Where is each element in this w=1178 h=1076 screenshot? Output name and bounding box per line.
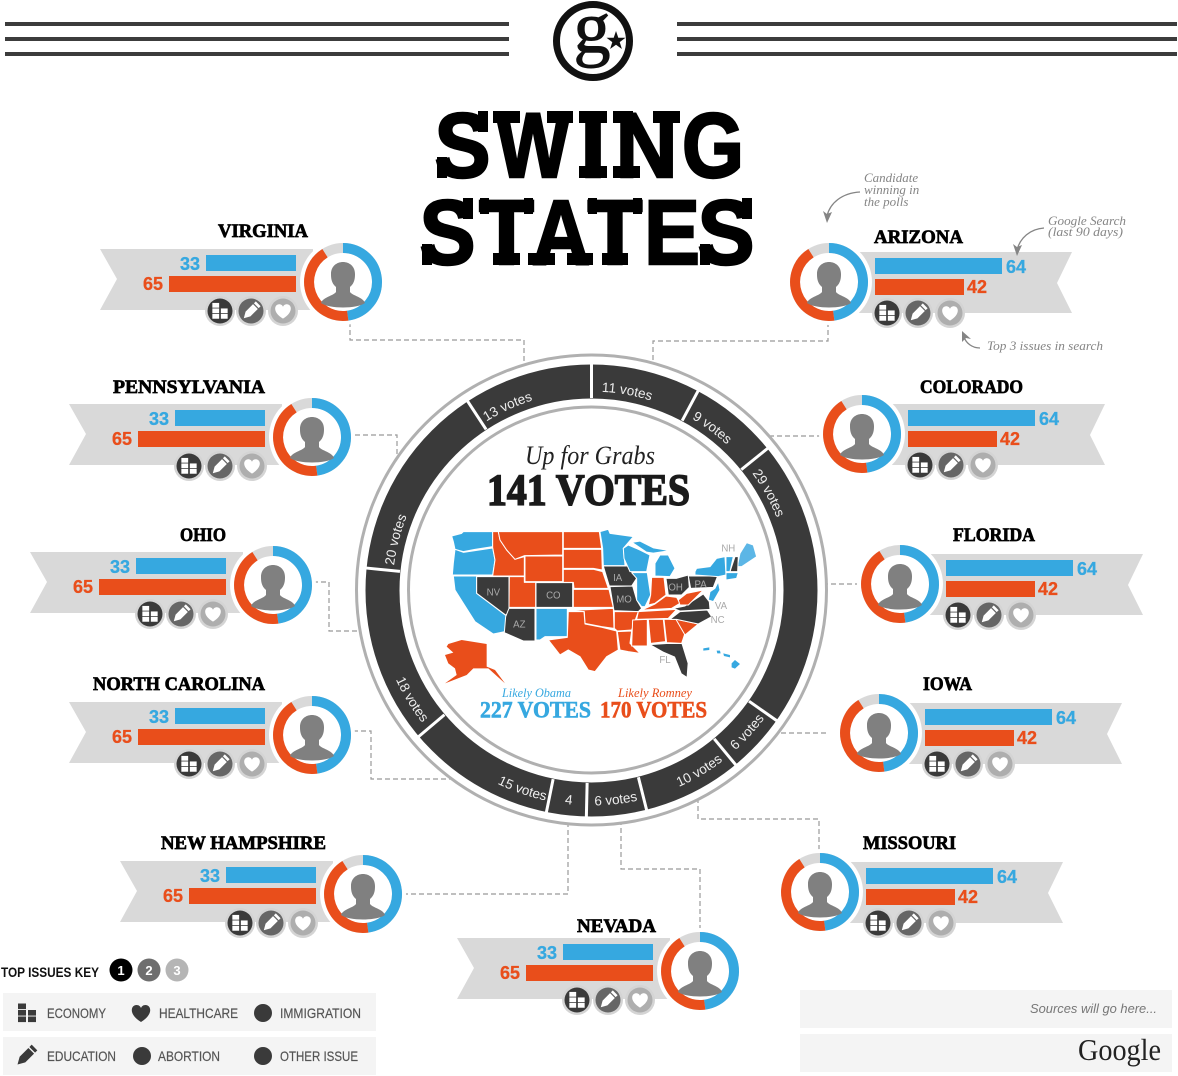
card: Virginia: VIRGINIA xyxy=(218,222,309,242)
google wordmark box xyxy=(800,1032,1172,1072)
map of US states: CO xyxy=(546,591,561,602)
card: Ohio xyxy=(30,526,316,629)
card: Pennsylvania: PENNSYLVANIA xyxy=(113,378,266,398)
card: Nevada: 65 xyxy=(500,963,520,983)
card: Florida xyxy=(857,526,1143,630)
title: T xyxy=(479,182,534,284)
title: W xyxy=(496,95,570,197)
card: North Carolina: 65 xyxy=(112,727,132,747)
map of US states: IA xyxy=(613,573,623,584)
google wordmark box: Google xyxy=(1078,1032,1161,1067)
title: S xyxy=(434,95,490,197)
header stripes: right xyxy=(677,22,1177,56)
card: Missouri: 64 xyxy=(997,867,1017,887)
key row 2: EDUCATION xyxy=(47,1048,116,1064)
card: Colorado xyxy=(819,378,1105,480)
dashed connectors xyxy=(313,322,860,930)
card: North Carolina: NORTH CAROLINA xyxy=(93,675,266,695)
top issues key heading: 1 xyxy=(117,963,125,978)
card: Virginia: 65 xyxy=(143,274,163,294)
title: T xyxy=(588,182,642,284)
card: Florida: 64 xyxy=(1077,559,1097,579)
card: Colorado: 64 xyxy=(1039,409,1059,429)
card: Iowa: IOWA xyxy=(923,675,973,695)
title: A xyxy=(532,182,590,284)
ring vote labels xyxy=(385,382,782,806)
annotation: google search last 90 days: Google Search xyxy=(1048,213,1126,228)
ring vote labels: 6 votes xyxy=(730,715,764,749)
legend: likely Romney xyxy=(600,686,707,722)
key row 2: OTHER ISSUE xyxy=(280,1048,358,1064)
key row 1: HEALTHCARE xyxy=(159,1005,238,1021)
card: Iowa: 42 xyxy=(1017,728,1037,748)
card: North Carolina xyxy=(69,675,355,779)
card: Colorado: 42 xyxy=(1000,429,1020,449)
top issues key heading xyxy=(1,958,188,982)
card: Florida: FLORIDA xyxy=(953,526,1036,546)
top issues key heading: 3 xyxy=(173,963,181,978)
card: New Hampshire xyxy=(120,834,406,938)
ring vote labels: 11 votes xyxy=(602,382,652,400)
heading: 141 votes: 141 VOTES xyxy=(487,466,690,514)
card: Ohio: OHIO xyxy=(180,526,226,546)
card: Nevada xyxy=(457,917,743,1015)
map of US states: MO xyxy=(616,595,632,606)
logo: g with star xyxy=(556,0,630,78)
card: Ohio: 65 xyxy=(73,577,93,597)
map of US states: NC xyxy=(711,615,725,626)
sources box xyxy=(800,990,1172,1028)
title: G xyxy=(682,95,744,197)
card: Virginia: 33 xyxy=(180,254,200,274)
card: Nevada: 33 xyxy=(537,943,557,963)
map of US states: FL xyxy=(659,655,671,666)
legend: likely Obama: 227 VOTES xyxy=(480,698,591,722)
ring vote labels: 13 votes xyxy=(484,394,532,421)
top issues key heading: 2 xyxy=(145,963,153,978)
card: Nevada: NEVADA xyxy=(577,917,657,937)
card: North Carolina: 33 xyxy=(149,707,169,727)
ring vote labels: 9 votes xyxy=(693,412,730,444)
legend: likely Obama xyxy=(480,686,591,722)
map of US states xyxy=(445,529,757,683)
map of US states: NH xyxy=(721,544,735,555)
card: New Hampshire: 33 xyxy=(200,866,220,886)
ring vote labels: 20 votes xyxy=(385,514,406,565)
legend: likely Obama: Likely Obama xyxy=(501,686,571,700)
title xyxy=(420,95,754,284)
ring vote labels: 29 votes xyxy=(752,469,782,517)
card: Pennsylvania: 33 xyxy=(149,409,169,429)
key row 1: ECONOMY xyxy=(47,1005,107,1021)
annotation: top 3 issues in search: Top 3 issues in search xyxy=(987,338,1103,353)
card: Iowa xyxy=(836,675,1122,779)
map of US states: VA xyxy=(715,601,728,612)
key row 2: ABORTION xyxy=(158,1048,220,1064)
annotation: google search last 90 days: (last 90 days) xyxy=(1048,224,1123,239)
annotation: candidate winning in the polls xyxy=(823,170,919,223)
card: Iowa: 64 xyxy=(1056,708,1076,728)
card: Arizona: ARIZONA xyxy=(874,228,964,248)
title: N xyxy=(616,95,678,197)
top issues key heading: TOP ISSUES KEY xyxy=(1,965,99,980)
title: S xyxy=(420,182,476,284)
card: New Hampshire: 65 xyxy=(163,886,183,906)
card: Missouri: MISSOURI xyxy=(863,834,956,854)
ring vote labels: 4 xyxy=(565,795,572,804)
annotation: candidate winning in the polls: Candidate xyxy=(864,170,918,185)
key row 1: IMMIGRATION xyxy=(280,1005,361,1021)
ring vote labels: 15 votes xyxy=(498,776,546,800)
header stripes: left xyxy=(5,22,509,56)
votes ring xyxy=(356,355,826,825)
card: Colorado: COLORADO xyxy=(920,378,1023,398)
title: S xyxy=(698,182,754,284)
card: Missouri xyxy=(777,834,1063,938)
sources box: Sources will go here... xyxy=(1030,1001,1157,1016)
card: Arizona: 42 xyxy=(967,277,987,297)
title: I xyxy=(580,95,606,197)
card: Missouri: 42 xyxy=(958,887,978,907)
key row 1 xyxy=(3,993,376,1031)
card: Arizona xyxy=(786,228,1072,328)
annotation: candidate winning in the polls: the polls xyxy=(864,194,908,209)
card: Pennsylvania: 65 xyxy=(112,429,132,449)
ring vote labels: 10 votes xyxy=(676,756,722,786)
card: New Hampshire: NEW HAMPSHIRE xyxy=(161,834,326,854)
annotation: google search last 90 days xyxy=(1013,213,1126,256)
ring vote labels: 6 votes xyxy=(595,794,637,806)
card: Ohio: 33 xyxy=(110,557,130,577)
legend: likely Romney: Likely Romney xyxy=(617,686,692,700)
card: Arizona: 64 xyxy=(1006,257,1026,277)
card: Florida: 42 xyxy=(1038,579,1058,599)
card: Pennsylvania xyxy=(69,378,355,481)
heading: up for grabs: Up for Grabs xyxy=(525,441,655,470)
map of US states: OH xyxy=(668,583,683,594)
legend: likely Romney: 170 VOTES xyxy=(600,698,707,722)
map of US states: PA xyxy=(695,579,707,590)
key row 2 xyxy=(3,1037,376,1075)
map of US states: NV xyxy=(487,588,501,599)
ring vote labels: 18 votes xyxy=(396,677,427,722)
title: E xyxy=(644,182,700,284)
map of US states: AZ xyxy=(513,620,526,631)
annotation: candidate winning in the polls: winning in xyxy=(864,182,919,197)
card: Virginia xyxy=(100,222,386,326)
annotation: top 3 issues in search xyxy=(962,331,1103,353)
